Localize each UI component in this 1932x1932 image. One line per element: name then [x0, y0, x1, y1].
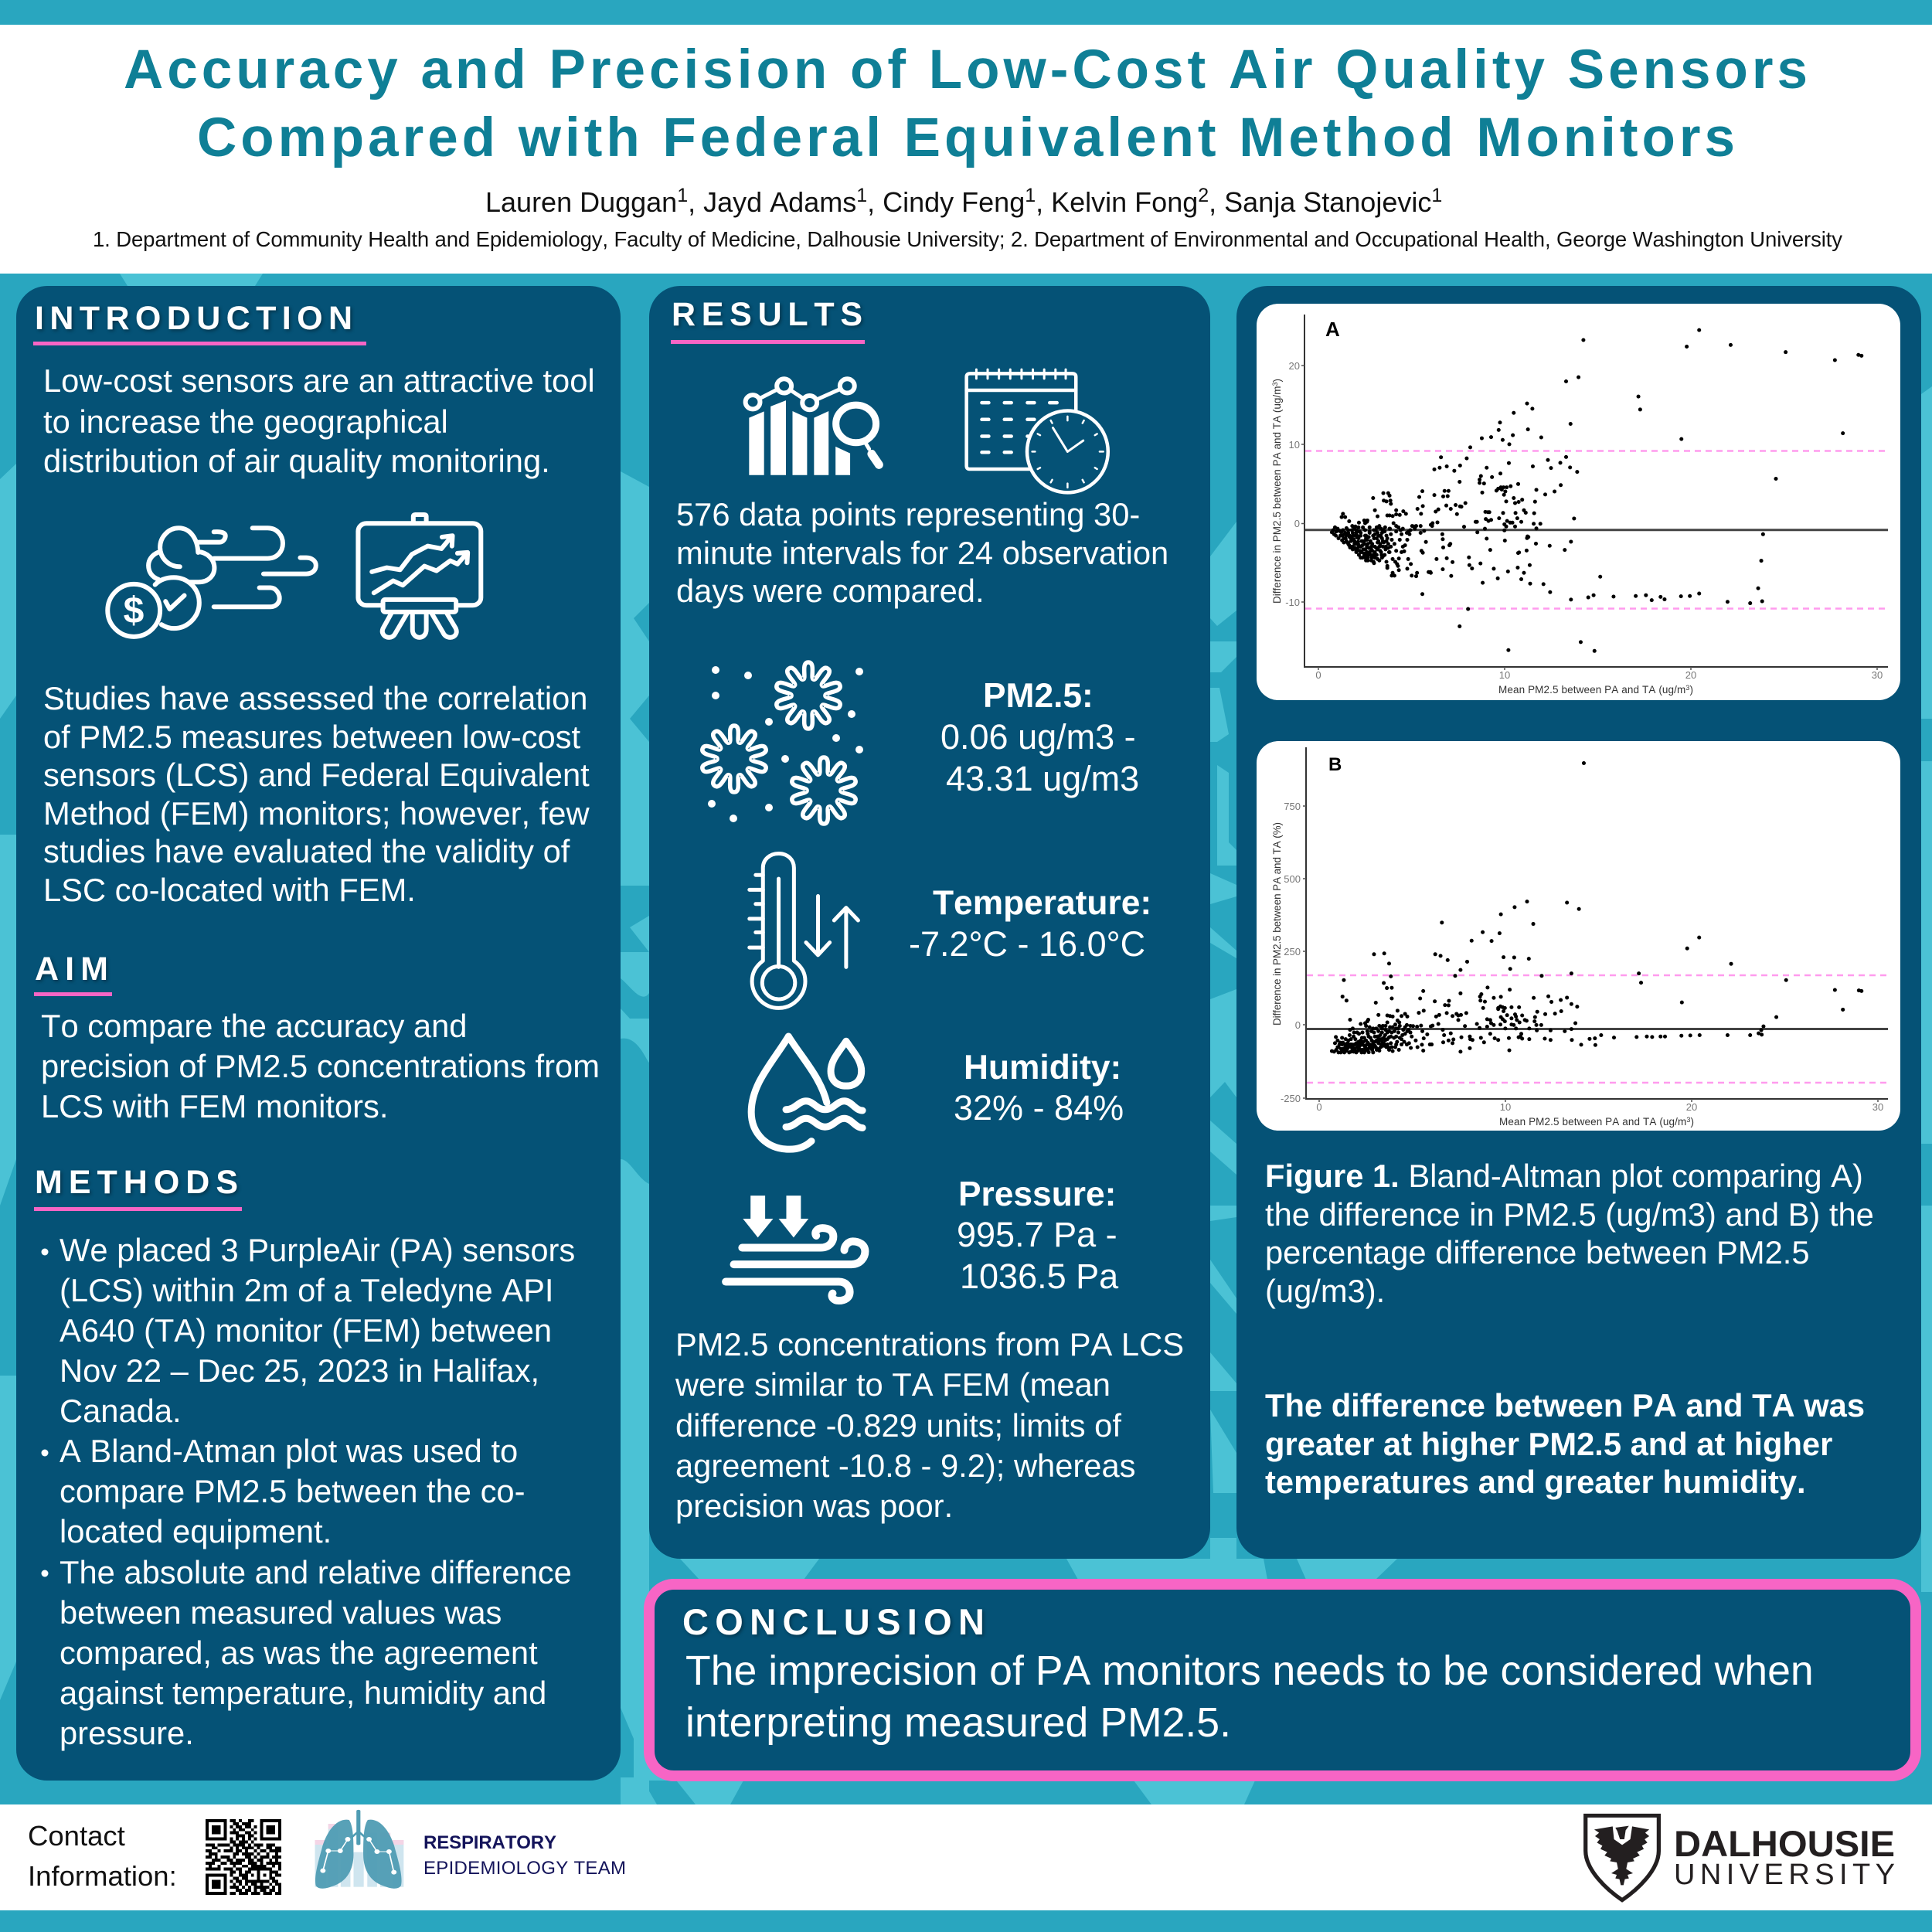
header [0, 25, 1932, 274]
title: Compared with Federal Equivalent Method Monitors [197, 107, 1735, 168]
QR code [206, 1821, 281, 1893]
text: introduction first paragraph: Low-cost sensors are an attractive tool [43, 362, 595, 399]
text: introduction second paragraph: Method (FEM) monitors; however, few [43, 795, 590, 832]
authors: , Sanja Stanojevic [1209, 186, 1431, 218]
chart: Bland-Altman plot B: 30 [1872, 1101, 1883, 1113]
text: contact information [28, 1820, 177, 1892]
text: pressure range: Pressure: [958, 1175, 1116, 1213]
text: pressure range: 995.7 Pa - [957, 1215, 1117, 1254]
text: conclusion: interpreting measured PM2.5. [685, 1699, 1231, 1746]
icon: pressure and wind [726, 1196, 865, 1301]
text: respiratory epidemiology team [423, 1832, 626, 1879]
text: methods list: A Bland-Atman plot was used to [60, 1433, 518, 1469]
top band [0, 0, 1932, 25]
text: data points: days were compared. [676, 573, 985, 609]
text: key finding: greater at higher PM2.5 and at higher [1265, 1426, 1832, 1462]
text: introduction second paragraph [43, 680, 590, 908]
text: introduction first paragraph [43, 362, 595, 479]
chart: Bland-Altman plot B: B [1328, 754, 1342, 775]
icon: calendar and clock [967, 369, 1108, 492]
text: data points: minute intervals for 24 observation [676, 535, 1168, 571]
panel: results [649, 286, 1210, 1559]
icon: humidity drops [751, 1036, 862, 1149]
authors: 1 [1431, 185, 1442, 206]
icon: low-cost air sensing [107, 528, 316, 637]
text: methods list: The absolute and relative difference [60, 1554, 572, 1590]
logo: Dalhousie shield [1586, 1815, 1658, 1900]
text: humidity range: Humidity: [964, 1049, 1121, 1087]
text: figure caption: (ug/m3). [1265, 1273, 1385, 1309]
text: results summary: were similar to TA FEM (mean [675, 1366, 1111, 1403]
chart: Bland-Altman plot A: 30 [1872, 669, 1883, 681]
heading: aim: AIM [35, 951, 108, 988]
chart: Bland-Altman plot A: 3 [1271, 383, 1279, 386]
authors: 1 [677, 185, 688, 206]
bottom band [0, 1910, 1932, 1932]
text: methods list [42, 1232, 575, 1751]
text: methods list: against temperature, humidity and [60, 1675, 546, 1711]
title [124, 39, 1808, 168]
text: figure caption [1265, 1158, 1874, 1309]
text: methods list: compared, as was the agreement [60, 1634, 538, 1671]
text: introduction first paragraph: distribution of air quality monitoring. [43, 443, 550, 479]
chart: Bland-Altman plot B: 0 [1316, 1101, 1322, 1113]
heading: results: RESULTS [672, 296, 862, 333]
chart: Bland-Altman plot B [1257, 741, 1900, 1131]
text: introduction second paragraph: of PM2.5 measures between low-cost [43, 719, 581, 755]
text: Dalhousie University: UNIVERSITY [1674, 1859, 1895, 1891]
text: temperature range [909, 884, 1151, 964]
text: introduction second paragraph: sensors (LCS) and Federal Equivalent [43, 757, 590, 793]
text: introduction second paragraph: LSC co-located with FEM. [43, 872, 416, 908]
chart: Bland-Altman plot B: 500 [1284, 873, 1301, 885]
affiliations: 1. Department of Community Health and Epidemiology, Faculty of Medicine, Dalhousie University; 2. Department of Environmental and Occupational Health, George Washington University [93, 227, 1842, 251]
text: Dalhousie University: DALHOUSIE [1674, 1823, 1895, 1864]
chart: Bland-Altman plot B: Difference in PM2.5 between PA and TA (%) [1271, 822, 1283, 1026]
text: results summary: precision was poor. [675, 1488, 953, 1524]
chart: Bland-Altman plot A: 0 [1315, 669, 1321, 681]
text: respiratory epidemiology team: EPIDEMIOLOGY TEAM [423, 1858, 626, 1879]
text: figure caption: percentage difference between PM2.5 [1265, 1234, 1810, 1270]
chart: Bland-Altman plot A: 20 [1289, 360, 1300, 372]
chart: Bland-Altman plot A: Difference in PM2.5 between PA and TA (ug/m [1271, 386, 1283, 604]
chart: Bland-Altman plot A: ) [1271, 379, 1283, 382]
authors: 1 [856, 185, 867, 206]
chart: Bland-Altman plot A: 0 [1294, 518, 1300, 529]
text: data points: 576 data points representing 30- [676, 496, 1140, 532]
text: temperature range: -7.2°C - 16.0°C [909, 924, 1145, 964]
text: methods list: (LCS) within 2m of a Teledyne API [60, 1272, 553, 1308]
text: methods list: A640 (TA) monitor (FEM) between [60, 1312, 552, 1349]
icon: chart with magnifier [746, 379, 879, 475]
text: pressure range [957, 1175, 1119, 1296]
chart: Bland-Altman plot B: 10 [1500, 1101, 1511, 1113]
authors: 2 [1198, 185, 1209, 206]
chart: Bland-Altman plot A: Mean PM2.5 between PA and TA (ug/m [1498, 684, 1685, 696]
text: key finding: The difference between PA and TA was [1265, 1387, 1865, 1423]
chart: Bland-Altman plot A: -10 [1285, 597, 1300, 608]
chart: Bland-Altman plot A: 10 [1499, 669, 1510, 681]
text: data points [676, 496, 1168, 609]
text: aim [41, 1008, 600, 1124]
text: methods list: compare PM2.5 between the co- [60, 1473, 525, 1509]
text: methods list: located equipment. [60, 1513, 332, 1549]
heading: conclusion: CONCLUSION [682, 1601, 985, 1642]
chart: Bland-Altman plot A: 3 [1685, 684, 1689, 692]
chart: Bland-Altman plot B: 250 [1284, 946, 1301, 957]
icon: particles [701, 662, 863, 824]
text: introduction first paragraph: to increase the geographical [43, 403, 448, 440]
authors: , Jayd Adams [688, 186, 856, 218]
text: figure caption: the difference in PM2.5 (ug/m3) and B) the [1265, 1196, 1874, 1233]
panel: figures [1236, 286, 1921, 1559]
title: Accuracy and Precision of Low-Cost Air Quality Sensors [124, 39, 1808, 100]
text: results summary: difference -0.829 units; limits of [675, 1407, 1121, 1444]
panel: conclusion [649, 1584, 1916, 1776]
chart: Bland-Altman plot A: 20 [1685, 669, 1696, 681]
chart: Bland-Altman plot B: -250 [1281, 1093, 1301, 1104]
text: methods list: between measured values was [60, 1594, 502, 1631]
chart: Bland-Altman plot B: 3 [1686, 1116, 1690, 1124]
text: conclusion: The imprecision of PA monitors needs to be considered when [685, 1648, 1814, 1694]
chart: Bland-Altman plot B: Mean PM2.5 between PA and TA (ug/m [1499, 1116, 1686, 1128]
chart: Bland-Altman plot B: 750 [1284, 801, 1301, 812]
text: pressure range: 1036.5 Pa [960, 1257, 1119, 1296]
chart: Bland-Altman plot B: 0 [1295, 1019, 1301, 1031]
authors: , Kelvin Fong [1036, 186, 1198, 218]
text: contact information: Information: [28, 1860, 177, 1892]
text: key finding: temperatures and greater humidity. [1265, 1464, 1806, 1500]
text: results summary: PM2.5 concentrations from PA LCS [675, 1326, 1184, 1362]
text: methods list: We placed 3 PurpleAir (PA) sensors [60, 1232, 575, 1268]
chart: Bland-Altman plot A: ) [1689, 684, 1693, 696]
text: humidity range [954, 1049, 1124, 1128]
chart: Bland-Altman plot B: 20 [1686, 1101, 1697, 1113]
text: Dalhousie University [1674, 1823, 1895, 1891]
text: results summary: agreement -10.8 - 9.2); whereas [675, 1447, 1136, 1484]
text: introduction second paragraph: Studies have assessed the correlation [43, 680, 587, 716]
footer [0, 1804, 1932, 1910]
text: methods list: Nov 22 – Dec 25, 2023 in Halifax, [60, 1352, 539, 1389]
text: PM2.5 range: PM2.5: [983, 677, 1094, 715]
chart: Bland-Altman plot A: A [1325, 318, 1340, 341]
logo: respiratory epidemiology team lungs [315, 1811, 403, 1889]
panel: introduction, aim and methods [16, 286, 621, 1781]
chart: Bland-Altman plot A: 10 [1289, 439, 1300, 451]
icon: thermometer [750, 853, 858, 1008]
text: aim: LCS with FEM monitors. [41, 1088, 388, 1124]
chart: Bland-Altman plot A [1257, 304, 1900, 700]
text: respiratory epidemiology team: RESPIRATORY [423, 1832, 556, 1853]
text: PM2.5 range: 43.31 ug/m3 [946, 759, 1139, 798]
icon: dollar sign: $ [124, 590, 145, 631]
text: key finding [1265, 1387, 1865, 1500]
heading: methods: METHODS [35, 1164, 238, 1201]
text: introduction second paragraph: studies have evaluated the validity of [43, 833, 570, 869]
text: aim: precision of PM2.5 concentrations from [41, 1048, 600, 1084]
text: conclusion [685, 1648, 1814, 1746]
text: PM2.5 range: 0.06 ug/m3 - [940, 717, 1136, 757]
authors: , Cindy Feng [867, 186, 1025, 218]
text: humidity range: 32% - 84% [954, 1088, 1124, 1128]
icon: presentation easel [358, 515, 481, 638]
chart: Bland-Altman plot B: ) [1691, 1116, 1694, 1128]
text: temperature range: Temperature: [933, 884, 1151, 922]
text: contact information: Contact [28, 1820, 125, 1852]
text: methods list: Canada. [60, 1393, 182, 1429]
authors: Lauren Duggan [485, 186, 677, 218]
text: PM2.5 range [940, 677, 1139, 798]
text: figure caption: Figure 1. Bland-Altman plot comparing A) [1265, 1158, 1863, 1194]
authors: 1 [1025, 185, 1036, 206]
text: aim: To compare the accuracy and [41, 1008, 467, 1044]
heading: introduction: INTRODUCTION [35, 300, 352, 337]
text: methods list: pressure. [60, 1715, 194, 1751]
text: results summary [675, 1326, 1184, 1524]
